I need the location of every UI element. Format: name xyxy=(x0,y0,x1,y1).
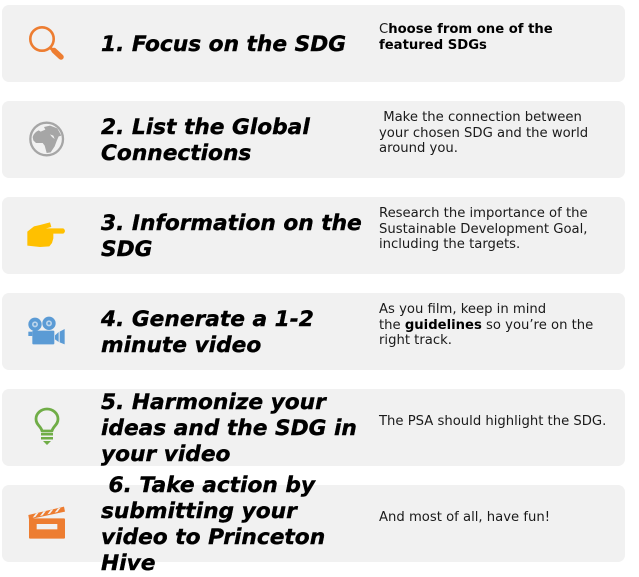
icon: globe xyxy=(29,122,64,156)
text: step 3: Sustainable Development Goal, xyxy=(379,222,588,236)
panel: step 3 xyxy=(2,197,625,274)
panel: step 5 xyxy=(2,389,625,466)
heading: step 6: Hive xyxy=(101,551,155,576)
text: step 3 xyxy=(379,206,588,252)
heading: step 6: 6. Take action by xyxy=(109,473,315,498)
text: step 3: including the targets. xyxy=(379,237,520,252)
text: step 5: The PSA should highlight the SDG. xyxy=(379,414,606,429)
text: step 3: Research the importance of the xyxy=(379,206,588,221)
heading: step 4: 4. Generate a 1-2 xyxy=(101,307,314,332)
heading: step 5 xyxy=(100,390,357,467)
heading: step 3 xyxy=(100,211,362,262)
heading: step 2: 2. List the Global xyxy=(101,115,310,140)
heading: step 4: minute video xyxy=(101,333,261,358)
heading: step 4 xyxy=(100,307,314,358)
text: step 2: around you. xyxy=(379,141,458,156)
text: step 2: Make the connection between xyxy=(383,110,582,125)
panel: step 1 xyxy=(2,5,625,82)
text: step 4: right track. xyxy=(379,333,452,348)
heading: step 5: your video xyxy=(101,442,230,467)
text: step 1: Choose from one of the xyxy=(379,22,553,37)
panel: step 2 xyxy=(2,101,625,178)
icon: video camera xyxy=(28,316,65,344)
heading: step 6: submitting your xyxy=(101,499,297,524)
heading: step 5: ideas and the SDG in xyxy=(101,416,357,441)
text: step 4: the guidelines so you’re on the xyxy=(379,318,593,332)
panel: step 4 xyxy=(2,293,625,370)
heading: step 5: 5. Harmonize your xyxy=(101,390,326,415)
text: step 1: featured SDGs xyxy=(379,38,487,52)
text: step 2 xyxy=(379,110,588,156)
text: step 4: As you film, keep in mind xyxy=(379,302,546,317)
heading: step 2: Connections xyxy=(101,141,251,166)
heading: step 6: video to Princeton xyxy=(101,525,325,550)
text: step 2: your chosen SDG and the world xyxy=(379,126,588,140)
icon: pointing hand xyxy=(27,222,65,247)
panel: step 6 xyxy=(2,485,625,562)
text: step 4 xyxy=(379,302,593,348)
heading: step 2 xyxy=(100,115,310,166)
icon: magnifying glass xyxy=(29,26,64,60)
heading: step 6 xyxy=(101,473,325,576)
heading: step 3: SDG xyxy=(101,237,152,262)
text: step 6: And most of all, have fun! xyxy=(379,510,550,525)
heading: step 1: 1. Focus on the SDG xyxy=(101,32,346,57)
text: step 1 xyxy=(379,22,553,52)
heading: step 3: 3. Information on the xyxy=(101,211,362,236)
icon: clapperboard xyxy=(28,506,65,539)
icon: light bulb xyxy=(34,408,60,445)
